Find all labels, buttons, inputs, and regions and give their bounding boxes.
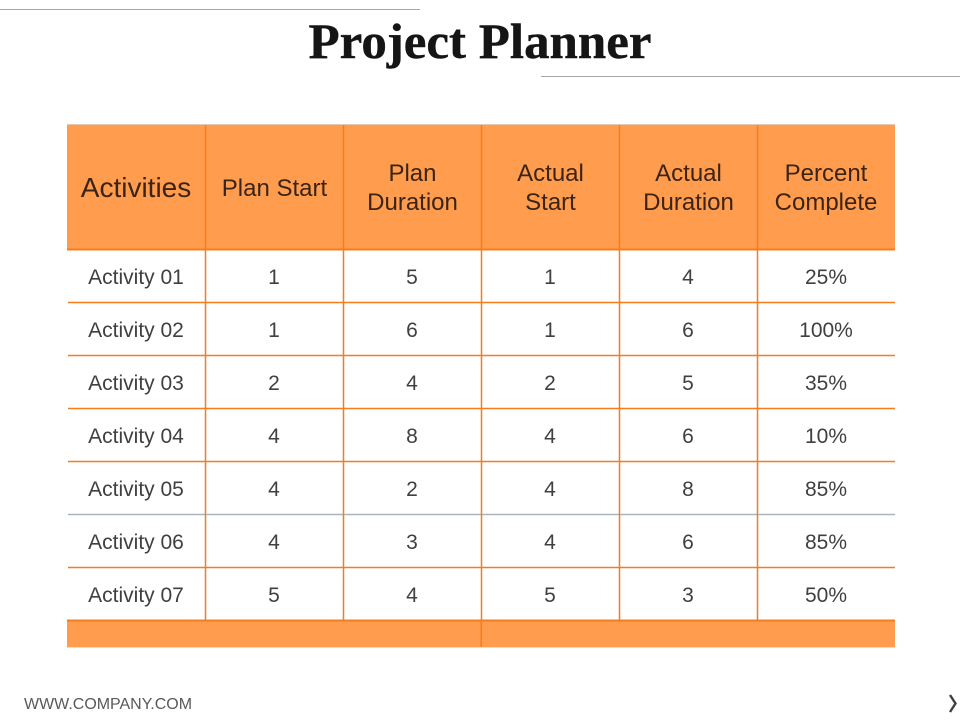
header: Actual Duration: Duration [643, 189, 734, 216]
row: Activity 04 [88, 425, 847, 448]
row: Activity 05: 85% [805, 478, 847, 501]
header: Actual Start [517, 160, 584, 216]
header: Percent Complete: Percent [785, 160, 868, 187]
row: Activity 02: 1 [268, 319, 280, 342]
row: Activity 07: 4 [406, 584, 418, 607]
row: Activity 05: 2 [406, 478, 418, 501]
row: Activity 07: Activity 07 [88, 584, 184, 607]
row: Activity 01: Activity 01 [88, 266, 184, 289]
header: Percent Complete: Complete [775, 189, 877, 216]
decorative top rule [0, 9, 420, 10]
row: Activity 03: Activity 03 [88, 372, 184, 395]
row: Activity 05: 4 [268, 478, 280, 501]
header: Actual Start: Start [525, 189, 576, 216]
footer website text: WWW.COMPANY.COM [24, 696, 192, 713]
row: Activity 01 [88, 266, 847, 289]
row: Activity 04: 8 [406, 425, 418, 448]
decorative title rule [541, 76, 960, 77]
row: Activity 07: 50% [805, 584, 847, 607]
row: Activity 02: Activity 02 [88, 319, 184, 342]
row: Activity 03 [88, 372, 847, 395]
row: Activity 01: 1 [268, 266, 280, 289]
table footer band [67, 620, 895, 648]
row: Activity 04: Activity 04 [88, 425, 184, 448]
row dividers [68, 302, 895, 568]
row: Activity 01: 5 [406, 266, 418, 289]
row: Activity 07: 5 [268, 584, 280, 607]
column dividers [205, 125, 758, 620]
row: Activity 02: 100% [799, 319, 853, 342]
row: Activity 04: 4 [544, 425, 556, 448]
row: Activity 07: 3 [682, 584, 694, 607]
row: Activity 05 [88, 478, 847, 501]
row: Activity 02: 6 [682, 319, 694, 342]
row: Activity 06: Activity 06 [88, 531, 184, 554]
row: Activity 04: 4 [268, 425, 280, 448]
header: Actual Duration: Actual [655, 160, 722, 187]
header: Plan Duration: Plan [388, 160, 437, 187]
row: Activity 06 [88, 531, 847, 554]
row: Activity 01: 1 [544, 266, 556, 289]
row: Activity 05: Activity 05 [88, 478, 184, 501]
row: Activity 06: 85% [805, 531, 847, 554]
header: Plan Duration [367, 160, 458, 216]
header: Plan Duration: Duration [367, 189, 458, 216]
header: Actual Start: Actual [517, 160, 584, 187]
row: Activity 02 [88, 319, 853, 342]
row: Activity 01: 25% [805, 266, 847, 289]
header: Plan Start: Plan Start [222, 175, 328, 202]
row: Activity 03: 5 [682, 372, 694, 395]
row: Activity 06: 6 [682, 531, 694, 554]
row: Activity 01: 4 [682, 266, 694, 289]
header: Actual Duration [643, 160, 734, 216]
row: Activity 07 [88, 584, 847, 607]
row: Activity 06: 3 [406, 531, 418, 554]
row: Activity 03: 2 [544, 372, 556, 395]
row: Activity 05: 4 [544, 478, 556, 501]
row: Activity 06: 4 [544, 531, 556, 554]
row: Activity 03: 4 [406, 372, 418, 395]
row: Activity 06: 4 [268, 531, 280, 554]
row: Activity 02: 1 [544, 319, 556, 342]
title: Project Planner [308, 13, 652, 69]
row: Activity 03: 2 [268, 372, 280, 395]
row: Activity 04: 10% [805, 425, 847, 448]
row: Activity 05: 8 [682, 478, 694, 501]
row: Activity 04: 6 [682, 425, 694, 448]
table header band [67, 124, 895, 250]
row: Activity 03: 35% [805, 372, 847, 395]
icon: next chevron [950, 695, 956, 712]
row: Activity 02: 6 [406, 319, 418, 342]
row: Activity 07: 5 [544, 584, 556, 607]
table [67, 124, 895, 648]
header: Percent Complete [775, 160, 877, 216]
header: Activities: Activities [81, 172, 191, 203]
